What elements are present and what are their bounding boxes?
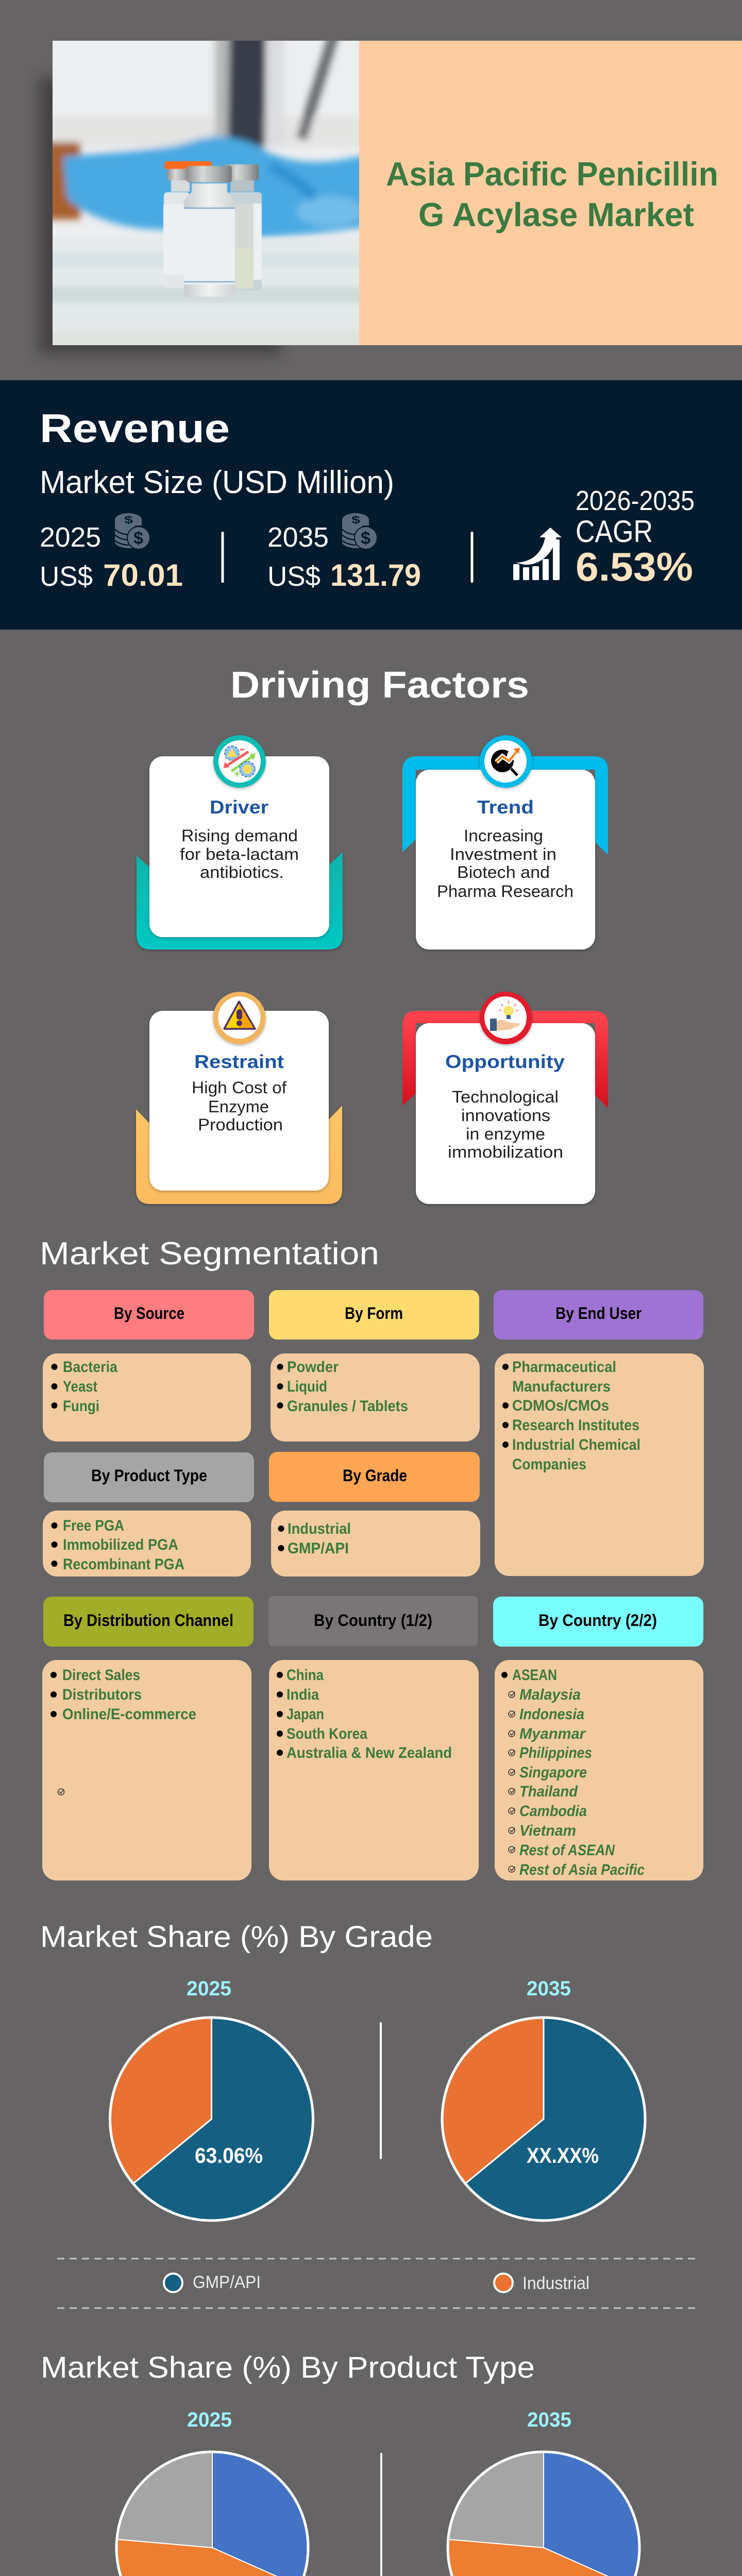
- heading: market share by grade: Market Share (%) By Grade: [40, 1920, 433, 1954]
- opportunity text: Technological: [452, 1088, 559, 1106]
- card: opportunity: [402, 992, 608, 1204]
- 2035 value: 131.79: [330, 558, 421, 592]
- icon: coins 2035: [342, 513, 378, 550]
- divider line: [380, 2022, 382, 2159]
- list: by distribution channel: Online/E-commerce: [62, 1706, 196, 1723]
- divider line: [380, 2453, 382, 2576]
- list: by form: Liquid: [287, 1378, 327, 1395]
- 2025 value: 70.01: [103, 558, 183, 592]
- title panel: [359, 41, 742, 345]
- driver text: for beta-lactam: [180, 845, 299, 863]
- panel: by product type: [43, 1452, 254, 1577]
- list: by grade: [271, 1511, 480, 1577]
- list: by grade: GMP/API: [288, 1540, 349, 1557]
- driver title: Driver: [210, 796, 268, 818]
- icon: coins 2025: [115, 513, 150, 550]
- list: by product type: Immobilized PGA: [63, 1536, 178, 1553]
- header: by form: [269, 1290, 479, 1340]
- panel: by grade: [269, 1452, 480, 1577]
- card: restraint: [136, 992, 342, 1204]
- list: by country 2: Rest of ASEAN: [519, 1842, 615, 1859]
- list: by country 1: South Korea: [286, 1725, 367, 1742]
- CAGR: [576, 485, 695, 589]
- list: by end user: Pharmaceutical: [512, 1359, 616, 1376]
- CAGR: 2026-2035: [576, 485, 695, 516]
- icon: trend: [480, 735, 532, 788]
- trend title: Trend: [477, 796, 534, 818]
- panel: by country 1: [268, 1596, 479, 1880]
- restraint text: Enzyme: [208, 1097, 269, 1116]
- driver text: antibiotics.: [200, 863, 284, 882]
- market segmentation heading: Market Segmentation: [40, 1236, 379, 1272]
- 2035 value: [267, 522, 421, 592]
- list: by end user: Research Institutes: [512, 1417, 639, 1434]
- icon: coins 2025: $: [124, 515, 133, 526]
- panel: by country 2: [493, 1597, 703, 1880]
- chart: grade 2035: [442, 1977, 645, 2221]
- list: by distribution channel: Distributors: [62, 1686, 142, 1703]
- chart: grade 2025: [110, 1977, 313, 2221]
- list: by country 2: [495, 1660, 703, 1880]
- chart: product type 2025: [116, 2409, 308, 2576]
- list: by country 2: Myanmar: [519, 1725, 586, 1742]
- pie: [110, 2018, 313, 2221]
- header: by country 2: By Country (2/2): [538, 1611, 657, 1630]
- list: by end user: Companies: [512, 1456, 586, 1473]
- opportunity text: [448, 1088, 563, 1161]
- header: by country 1: By Country (1/2): [314, 1611, 432, 1630]
- list: by form: Granules / Tablets: [287, 1398, 408, 1415]
- 2025 value: [40, 522, 183, 592]
- trend text: Pharma Research: [437, 882, 574, 901]
- list: by country 2: Singapore: [519, 1764, 587, 1781]
- list: by end user: [495, 1353, 704, 1576]
- card body: [416, 1023, 595, 1204]
- card body: [149, 1011, 329, 1191]
- list: by product type: Recombinant PGA: [63, 1556, 184, 1573]
- header: by grade: By Grade: [343, 1466, 407, 1485]
- card body: [149, 756, 329, 937]
- hero photo: vials: [46, 31, 366, 351]
- list: by end user: Manufacturers: [512, 1378, 611, 1395]
- title text: [386, 155, 718, 233]
- header: by distribution channel: [43, 1597, 254, 1647]
- trend text: [437, 826, 574, 901]
- year label: 2025: [187, 2409, 232, 2431]
- list: by country 2: Cambodia: [519, 1803, 587, 1820]
- trend text: Increasing: [464, 826, 543, 845]
- header: by source: [44, 1290, 254, 1340]
- panel: by source: [43, 1290, 254, 1442]
- header: by country 2: [493, 1597, 703, 1647]
- list: by country 1: Australia & New Zealand: [286, 1744, 452, 1761]
- list: by country 2: Vietnam: [519, 1822, 576, 1839]
- revenue band: [0, 380, 742, 630]
- list: by country 1: [269, 1660, 479, 1880]
- driver text: [180, 826, 299, 882]
- trend text: Biotech and: [457, 863, 550, 882]
- back-left vial: [163, 161, 212, 288]
- year label: 2025: [187, 1977, 231, 2000]
- panel: by form: [269, 1290, 480, 1442]
- pie value: 63.06%: [195, 2143, 263, 2167]
- list: by product type: [43, 1511, 251, 1577]
- revenue heading: Revenue: [40, 405, 230, 451]
- list: by end user: CDMOs/CMOs: [512, 1397, 609, 1414]
- restraint title: Restraint: [194, 1051, 284, 1072]
- header: by end user: By End User: [555, 1304, 642, 1323]
- driving factors heading: Driving Factors: [230, 665, 529, 706]
- icon: opportunity: [480, 992, 532, 1044]
- opportunity text: immobilization: [448, 1143, 563, 1161]
- chart: product type 2035: [448, 2409, 639, 2576]
- restraint text: Production: [198, 1115, 283, 1134]
- opportunity text: innovations: [461, 1106, 550, 1125]
- list: by end user: Industrial Chemical: [512, 1436, 640, 1453]
- list: by country 2: Philippines: [519, 1744, 592, 1761]
- divider: [222, 532, 224, 583]
- card ribbon: [136, 1106, 342, 1204]
- year label: 2035: [527, 1977, 571, 2000]
- pie: [442, 2018, 645, 2221]
- card ribbon: [402, 1011, 608, 1108]
- icon: coins 2035: $: [351, 515, 360, 526]
- list: by country 2: Rest of Asia Pacific: [519, 1861, 645, 1878]
- list: by source: Fungi: [63, 1398, 99, 1415]
- market size label: Market Size (USD Million): [40, 465, 394, 500]
- list: by product type: Free PGA: [63, 1517, 124, 1534]
- front vial: [184, 166, 235, 297]
- 2025 value: 2025: [40, 522, 101, 553]
- list: by country 1: China: [286, 1667, 324, 1684]
- list: by source: Bacteria: [63, 1359, 117, 1376]
- restraint text: [192, 1078, 286, 1134]
- card ribbon: [402, 756, 608, 855]
- icon: growth chart: [513, 528, 562, 580]
- trend text: Investment in: [450, 845, 556, 863]
- card: trend: [402, 735, 608, 950]
- 2035 value: 2035: [267, 522, 329, 553]
- list: by country 2: Malaysia: [519, 1686, 581, 1703]
- restraint text: High Cost of: [192, 1078, 286, 1097]
- year label: 2035: [527, 2409, 571, 2431]
- 2025 value: US$: [40, 561, 93, 592]
- header: by form: By Form: [345, 1304, 403, 1323]
- header: by end user: [494, 1290, 703, 1340]
- list: by distribution channel: Direct Sales: [62, 1667, 140, 1684]
- list: by country 1: India: [286, 1686, 319, 1703]
- legend: grade: GMP/API: [193, 2273, 261, 2292]
- driver text: Rising demand: [181, 826, 298, 845]
- hero banner: [39, 31, 742, 354]
- 2035 value: US$: [267, 561, 321, 592]
- CAGR: 6.53%: [576, 544, 693, 589]
- list: by country 2: ASEAN: [512, 1667, 557, 1684]
- legend: grade: [57, 2259, 700, 2308]
- panel: by end user: [494, 1290, 704, 1576]
- pie: [116, 2452, 308, 2576]
- icon: driver: [213, 735, 266, 788]
- back-right vial: [225, 164, 262, 291]
- card ribbon: [137, 852, 343, 950]
- hero shadow: [39, 77, 281, 354]
- list: by country 2: Indonesia: [519, 1706, 584, 1723]
- opportunity title: Opportunity: [445, 1051, 565, 1072]
- list: by form: Powder: [287, 1359, 339, 1376]
- panel: by distribution channel: [42, 1597, 254, 1880]
- list: by form: [271, 1353, 480, 1442]
- list: by distribution channel: [42, 1660, 251, 1880]
- card body: [416, 770, 595, 950]
- legend: grade: Industrial: [522, 2274, 589, 2293]
- icon: restraint: [213, 992, 266, 1044]
- list: by country 1: Japan: [286, 1706, 324, 1723]
- list: by source: Yeast: [63, 1378, 97, 1395]
- CAGR: CAGR: [576, 514, 653, 549]
- header: by source: By Source: [114, 1304, 184, 1323]
- header: by product type: By Product Type: [91, 1466, 207, 1485]
- list: by country 2: Thailand: [519, 1783, 578, 1800]
- pie value: XX.XX%: [527, 2143, 599, 2167]
- icon: coins 2025: $: [133, 529, 143, 548]
- opportunity text: in enzyme: [466, 1125, 545, 1143]
- heading: market share by product type: Market Share (%) By Product Type: [41, 2351, 535, 2384]
- header: by grade: [269, 1452, 480, 1502]
- divider: [471, 532, 473, 583]
- header: by distribution channel: By Distribution Channel: [63, 1611, 233, 1630]
- list: by source: [43, 1353, 251, 1442]
- header: by product type: [44, 1452, 254, 1502]
- header: by country 1: [268, 1596, 478, 1646]
- title text: Asia Pacific Penicillin: [386, 155, 718, 193]
- list: by grade: Industrial: [288, 1520, 351, 1537]
- icon: coins 2035: $: [361, 529, 370, 548]
- card: driver: [137, 735, 343, 950]
- pie: [448, 2452, 639, 2576]
- title text: G Acylase Market: [418, 196, 694, 233]
